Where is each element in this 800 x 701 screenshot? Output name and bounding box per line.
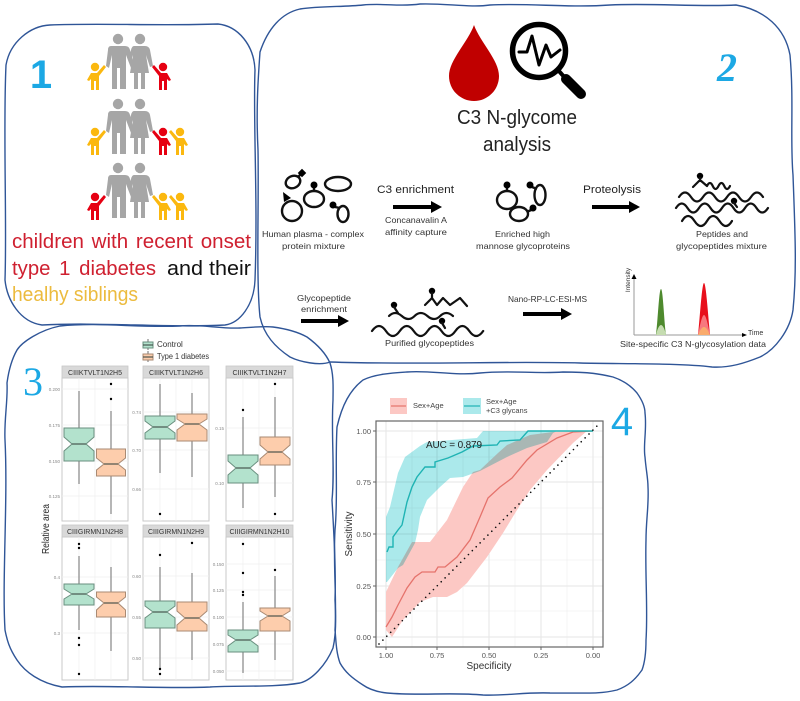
x tick labels: 0.25 (534, 651, 548, 660)
facet: CIIIGIRMN1N2H8: 0.3 (54, 631, 60, 636)
label: peptides mixture: glycopeptides mixture (676, 241, 767, 251)
diagonal reference line (379, 423, 600, 644)
label: human plasma: protein mixture (282, 241, 345, 251)
y tick labels: 0.00 (356, 633, 371, 642)
facet: CIIIGIRMN1N2H10: 0.100 (213, 615, 224, 620)
label: enriched glycoproteins: mannose glycoproteins (476, 241, 570, 251)
legend (143, 339, 209, 362)
label: glycopeptide enrichment: Glycopeptide (297, 293, 351, 303)
facet: CIIIGIRMN1N2H8 (54, 525, 128, 680)
legend: Type 1 diabetes (157, 352, 209, 361)
curve: sex and age (386, 431, 593, 627)
icon: enriched glycoproteins (497, 182, 546, 221)
facet: CIIIGIRMN1N2H10: 0.125 (213, 588, 224, 593)
text: cohort description (12, 231, 251, 306)
facet: CIIIKTVLT1N2H5: 0.150 (49, 459, 60, 464)
legend: Control (157, 340, 183, 349)
label: site-specific data: Site-specific C3 N-glycosylation data (620, 339, 766, 349)
x tick labels: 0.50 (482, 651, 496, 660)
label: glycopeptide enrichment: enrichment (301, 304, 348, 314)
panel 4: ROC curve (334, 372, 648, 695)
facet: CIIIGIRMN1N2H10 (213, 525, 293, 680)
facet: CIIIGIRMN1N2H10: 0.150 (213, 562, 224, 567)
facet: CIIIKTVLT1N2H6: CIIIKTVLT1N2H6 (149, 370, 203, 377)
label: enriched glycoproteins (476, 229, 570, 251)
y tick labels: 1.00 (356, 427, 371, 436)
y tick labels: 0.50 (356, 530, 371, 539)
panel 1: study participants (5, 24, 256, 326)
facet: CIIIKTVLT1N2H7: 0.10 (215, 481, 224, 486)
facet: CIIIKTVLT1N2H6: 0.74 (132, 410, 141, 415)
x tick labels (379, 651, 600, 660)
facet: CIIIGIRMN1N2H9: 0.55 (132, 615, 141, 620)
legend (390, 397, 528, 415)
heading (457, 107, 577, 156)
x axis title: Specificity (466, 661, 512, 672)
icon: purified glycopeptides (372, 288, 483, 336)
icon: family three (87, 163, 188, 220)
icon: family two (87, 99, 188, 155)
label: human plasma (262, 229, 365, 251)
facet: CIIIGIRMN1N2H10: 0.050 (213, 669, 224, 674)
text: cohort description: healhy siblings (12, 284, 138, 306)
facet: CIIIKTVLT1N2H5: 0.125 (49, 494, 60, 499)
facet: CIIIGIRMN1N2H9: CIIIGIRMN1N2H9 (148, 529, 204, 536)
chart: chromatogram (625, 267, 763, 337)
facet: CIIIGIRMN1N2H9 (132, 525, 209, 680)
text: cohort description: type 1 diabetes (12, 258, 156, 280)
icon: plasma protein mixture (282, 169, 351, 222)
facet: CIIIKTVLT1N2H5: 0.200 (49, 387, 60, 392)
text: cohort description: children with recent onset (12, 231, 251, 253)
label: proteolysis: Proteolysis (583, 184, 642, 196)
arrow: glycopeptide enrichment (301, 315, 349, 327)
label: human plasma: Human plasma - complex (262, 229, 365, 239)
facet: CIIIKTVLT1N2H5: 0.175 (49, 423, 60, 428)
icon: family one (87, 34, 171, 90)
arrow: C3 enrichment (393, 201, 442, 213)
peak: red (698, 283, 710, 335)
arrow: proteolysis (592, 201, 640, 213)
label: concanavalin A (385, 215, 447, 237)
legend: Sex+Age (486, 397, 517, 406)
x tick labels: 0.00 (586, 651, 600, 660)
y tick labels (356, 427, 371, 642)
x tick labels: 0.75 (430, 651, 444, 660)
facet: CIIIGIRMN1N2H8: 0.4 (54, 575, 60, 580)
band: sex, age and C3 glycans (386, 431, 557, 582)
icon: magnifier with signal (512, 24, 581, 94)
label: purified glycopeptides: Purified glycopeptides (385, 338, 474, 348)
heading: analysis (483, 134, 551, 156)
label: concanavalin A: affinity capture (385, 227, 447, 237)
axis label: time: Time (748, 330, 763, 337)
facet: CIIIKTVLT1N2H7 (215, 366, 293, 521)
facet: CIIIKTVLT1N2H6: 0.70 (132, 448, 141, 453)
band: sex and age (386, 431, 587, 637)
facet: CIIIKTVLT1N2H6 (132, 366, 209, 521)
y axis title: Relative area (41, 504, 52, 554)
y axis title: Sensitivity (344, 511, 355, 557)
curve: sex, age and C3 glycans (387, 431, 593, 552)
number 2: 2 (716, 45, 737, 90)
label: Nano-RP-LC-ESI-MS: Nano-RP-LC-ESI-MS (508, 294, 587, 304)
facet: CIIIKTVLT1N2H7: 0.15 (215, 426, 224, 431)
arrow: mass spectrometry (523, 308, 572, 320)
panel 2: C3 N-glycome analysis (257, 4, 795, 367)
label: concanavalin A: Concanavalin A (385, 215, 447, 225)
y tick labels: 0.25 (356, 582, 371, 591)
facet: CIIIGIRMN1N2H9: 0.60 (132, 574, 141, 579)
peak: green (656, 289, 666, 335)
number 1: 1 (30, 53, 52, 97)
number 4: 4 (611, 400, 633, 444)
heading: C3 N-glycome (457, 107, 577, 129)
icon: peptide mixture (676, 173, 768, 226)
AUC annotation: AUC = 0.879 (426, 440, 482, 451)
axis label: intensity: Intensity (625, 267, 632, 292)
label: enriched glycoproteins: Enriched high (495, 229, 550, 239)
facet: CIIIGIRMN1N2H9: 0.50 (132, 656, 141, 661)
label: C3 enrichment: C3 enrichment (377, 184, 454, 196)
x tick labels: 1.00 (379, 651, 393, 660)
legend: +C3 glycans (486, 406, 528, 415)
facet: CIIIGIRMN1N2H8: CIIIGIRMN1N2H8 (67, 529, 123, 536)
facet: CIIIKTVLT1N2H5: CIIIKTVLT1N2H5 (68, 370, 122, 377)
y tick labels: 0.75 (356, 478, 371, 487)
panel 3: boxplots (4, 325, 336, 688)
icon: blood drop (449, 25, 499, 101)
number 3: 3 (23, 359, 43, 404)
label: glycopeptide enrichment (297, 293, 351, 314)
facet: CIIIGIRMN1N2H10: CIIIGIRMN1N2H10 (230, 529, 290, 536)
facet: CIIIKTVLT1N2H7: CIIIKTVLT1N2H7 (233, 370, 287, 377)
legend: Sex+Age (413, 401, 444, 410)
facet: CIIIGIRMN1N2H10: 0.075 (213, 642, 224, 647)
facet: CIIIKTVLT1N2H5 (49, 366, 128, 521)
facet: CIIIKTVLT1N2H6: 0.66 (132, 487, 141, 492)
chart: ROC (344, 421, 603, 672)
text: cohort description: and their (167, 258, 251, 280)
label: peptides mixture: Peptides and (696, 229, 748, 239)
label: peptides mixture (676, 229, 767, 251)
